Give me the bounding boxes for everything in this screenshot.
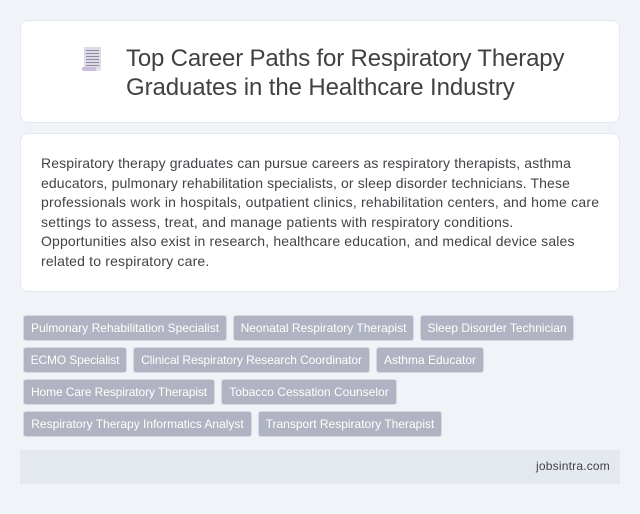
tag: Sleep Disorder Technician [420, 315, 574, 341]
tag: Clinical Respiratory Research Coordinator: Clinical Respiratory Research Coordinator [141, 353, 362, 367]
description text: Opportunities also exist in research, healthcare education, and medical device sales [41, 233, 575, 249]
tag: Home Care Respiratory Therapist: Home Care Respiratory Therapist [31, 385, 207, 399]
description text: educators, pulmonary rehabilitation specialists, or sleep disorder technicians. These [41, 174, 570, 190]
footer bar [20, 450, 620, 484]
tag: Sleep Disorder Technician: Sleep Disorder Technician [427, 321, 567, 335]
tag: Asthma Educator [376, 347, 484, 373]
description text: related to respiratory care. [41, 252, 209, 268]
description text: Respiratory therapy graduates can pursue careers as respiratory therapists, asthma [41, 155, 571, 171]
header panel [20, 20, 620, 123]
icon: document scroll [82, 47, 101, 71]
tag: Neonatal Respiratory Therapist: Neonatal Respiratory Therapist [241, 321, 406, 335]
tag: Respiratory Therapy Informatics Analyst [23, 411, 252, 437]
tag: Clinical Respiratory Research Coordinator [133, 347, 370, 373]
tag: ECMO Specialist [23, 347, 127, 373]
tag: Pulmonary Rehabilitation Specialist [23, 315, 227, 341]
tag: Transport Respiratory Therapist [258, 411, 442, 437]
tag: Transport Respiratory Therapist: Transport Respiratory Therapist [266, 417, 434, 431]
tag: ECMO Specialist: ECMO Specialist [31, 353, 119, 367]
description text [41, 155, 599, 269]
description text: professionals work in hospitals, outpatient clinics, rehabilitation centers, and home care [41, 194, 599, 210]
tag: Neonatal Respiratory Therapist [233, 315, 414, 341]
title [126, 45, 564, 101]
tag: Tobacco Cessation Counselor: Tobacco Cessation Counselor [229, 385, 389, 399]
title: Top Career Paths for Respiratory Therapy [126, 45, 564, 72]
tag: Pulmonary Rehabilitation Specialist: Pulmonary Rehabilitation Specialist [31, 321, 219, 335]
title: Graduates in the Healthcare Industry [126, 74, 515, 101]
footer text: jobsintra.com [536, 459, 610, 473]
tag: Respiratory Therapy Informatics Analyst: Respiratory Therapy Informatics Analyst [31, 417, 244, 431]
tag: Asthma Educator: Asthma Educator [384, 353, 476, 367]
tag: Home Care Respiratory Therapist [23, 379, 215, 405]
description panel [20, 133, 620, 292]
tag: Tobacco Cessation Counselor [221, 379, 397, 405]
description text: settings to assess, treat, and manage patients with respiratory conditions. [41, 214, 514, 230]
